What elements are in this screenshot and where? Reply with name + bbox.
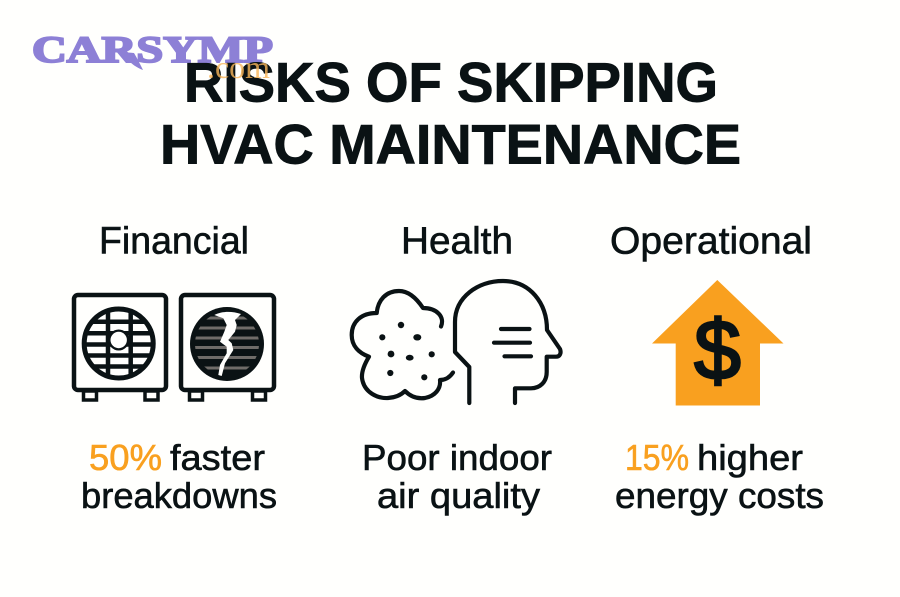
icon: dust cloud [352, 291, 453, 398]
title: HVAC MAINTENANCE [160, 112, 741, 176]
text block: poor indoor air quality: air quality [377, 475, 540, 516]
text block: poor indoor air quality [362, 437, 552, 516]
text block: 15% higher energy costs: 15% [625, 437, 689, 478]
icon: healthy unit with grille [74, 295, 166, 400]
title [160, 50, 741, 176]
text block: 50% faster breakdowns: breakdowns [81, 475, 277, 516]
text block: 15% higher energy costs: energy costs [615, 475, 824, 516]
icon: two outdoor HVAC units [74, 295, 274, 400]
text block: 50% faster breakdowns: faster [170, 437, 265, 478]
text block: 50% faster breakdowns: 50% [89, 437, 162, 478]
text block: poor indoor air quality: Poor indoor [362, 437, 552, 478]
heading: Operational: Operational [610, 220, 812, 262]
title: RISKS OF SKIPPING [184, 50, 718, 114]
icon: orange up arrow with dollar sign [652, 280, 784, 406]
heading: Health: Health [401, 220, 513, 262]
icon: orange up arrow with dollar sign: $ [694, 303, 741, 397]
text block: 50% faster breakdowns [81, 437, 277, 516]
icon: broken unit with crack [181, 295, 274, 400]
watermark logo: CARSYMP: CARSYMP [32, 30, 273, 71]
icon: dust cloud and head [352, 281, 561, 403]
text block: 15% higher energy costs [615, 437, 824, 516]
heading: Financial: Financial [99, 220, 249, 262]
watermark logo: .com: .com [207, 49, 270, 85]
icon: head profile [455, 281, 561, 403]
infographic canvas [33, 36, 823, 516]
text block: 15% higher energy costs: higher [697, 437, 803, 478]
